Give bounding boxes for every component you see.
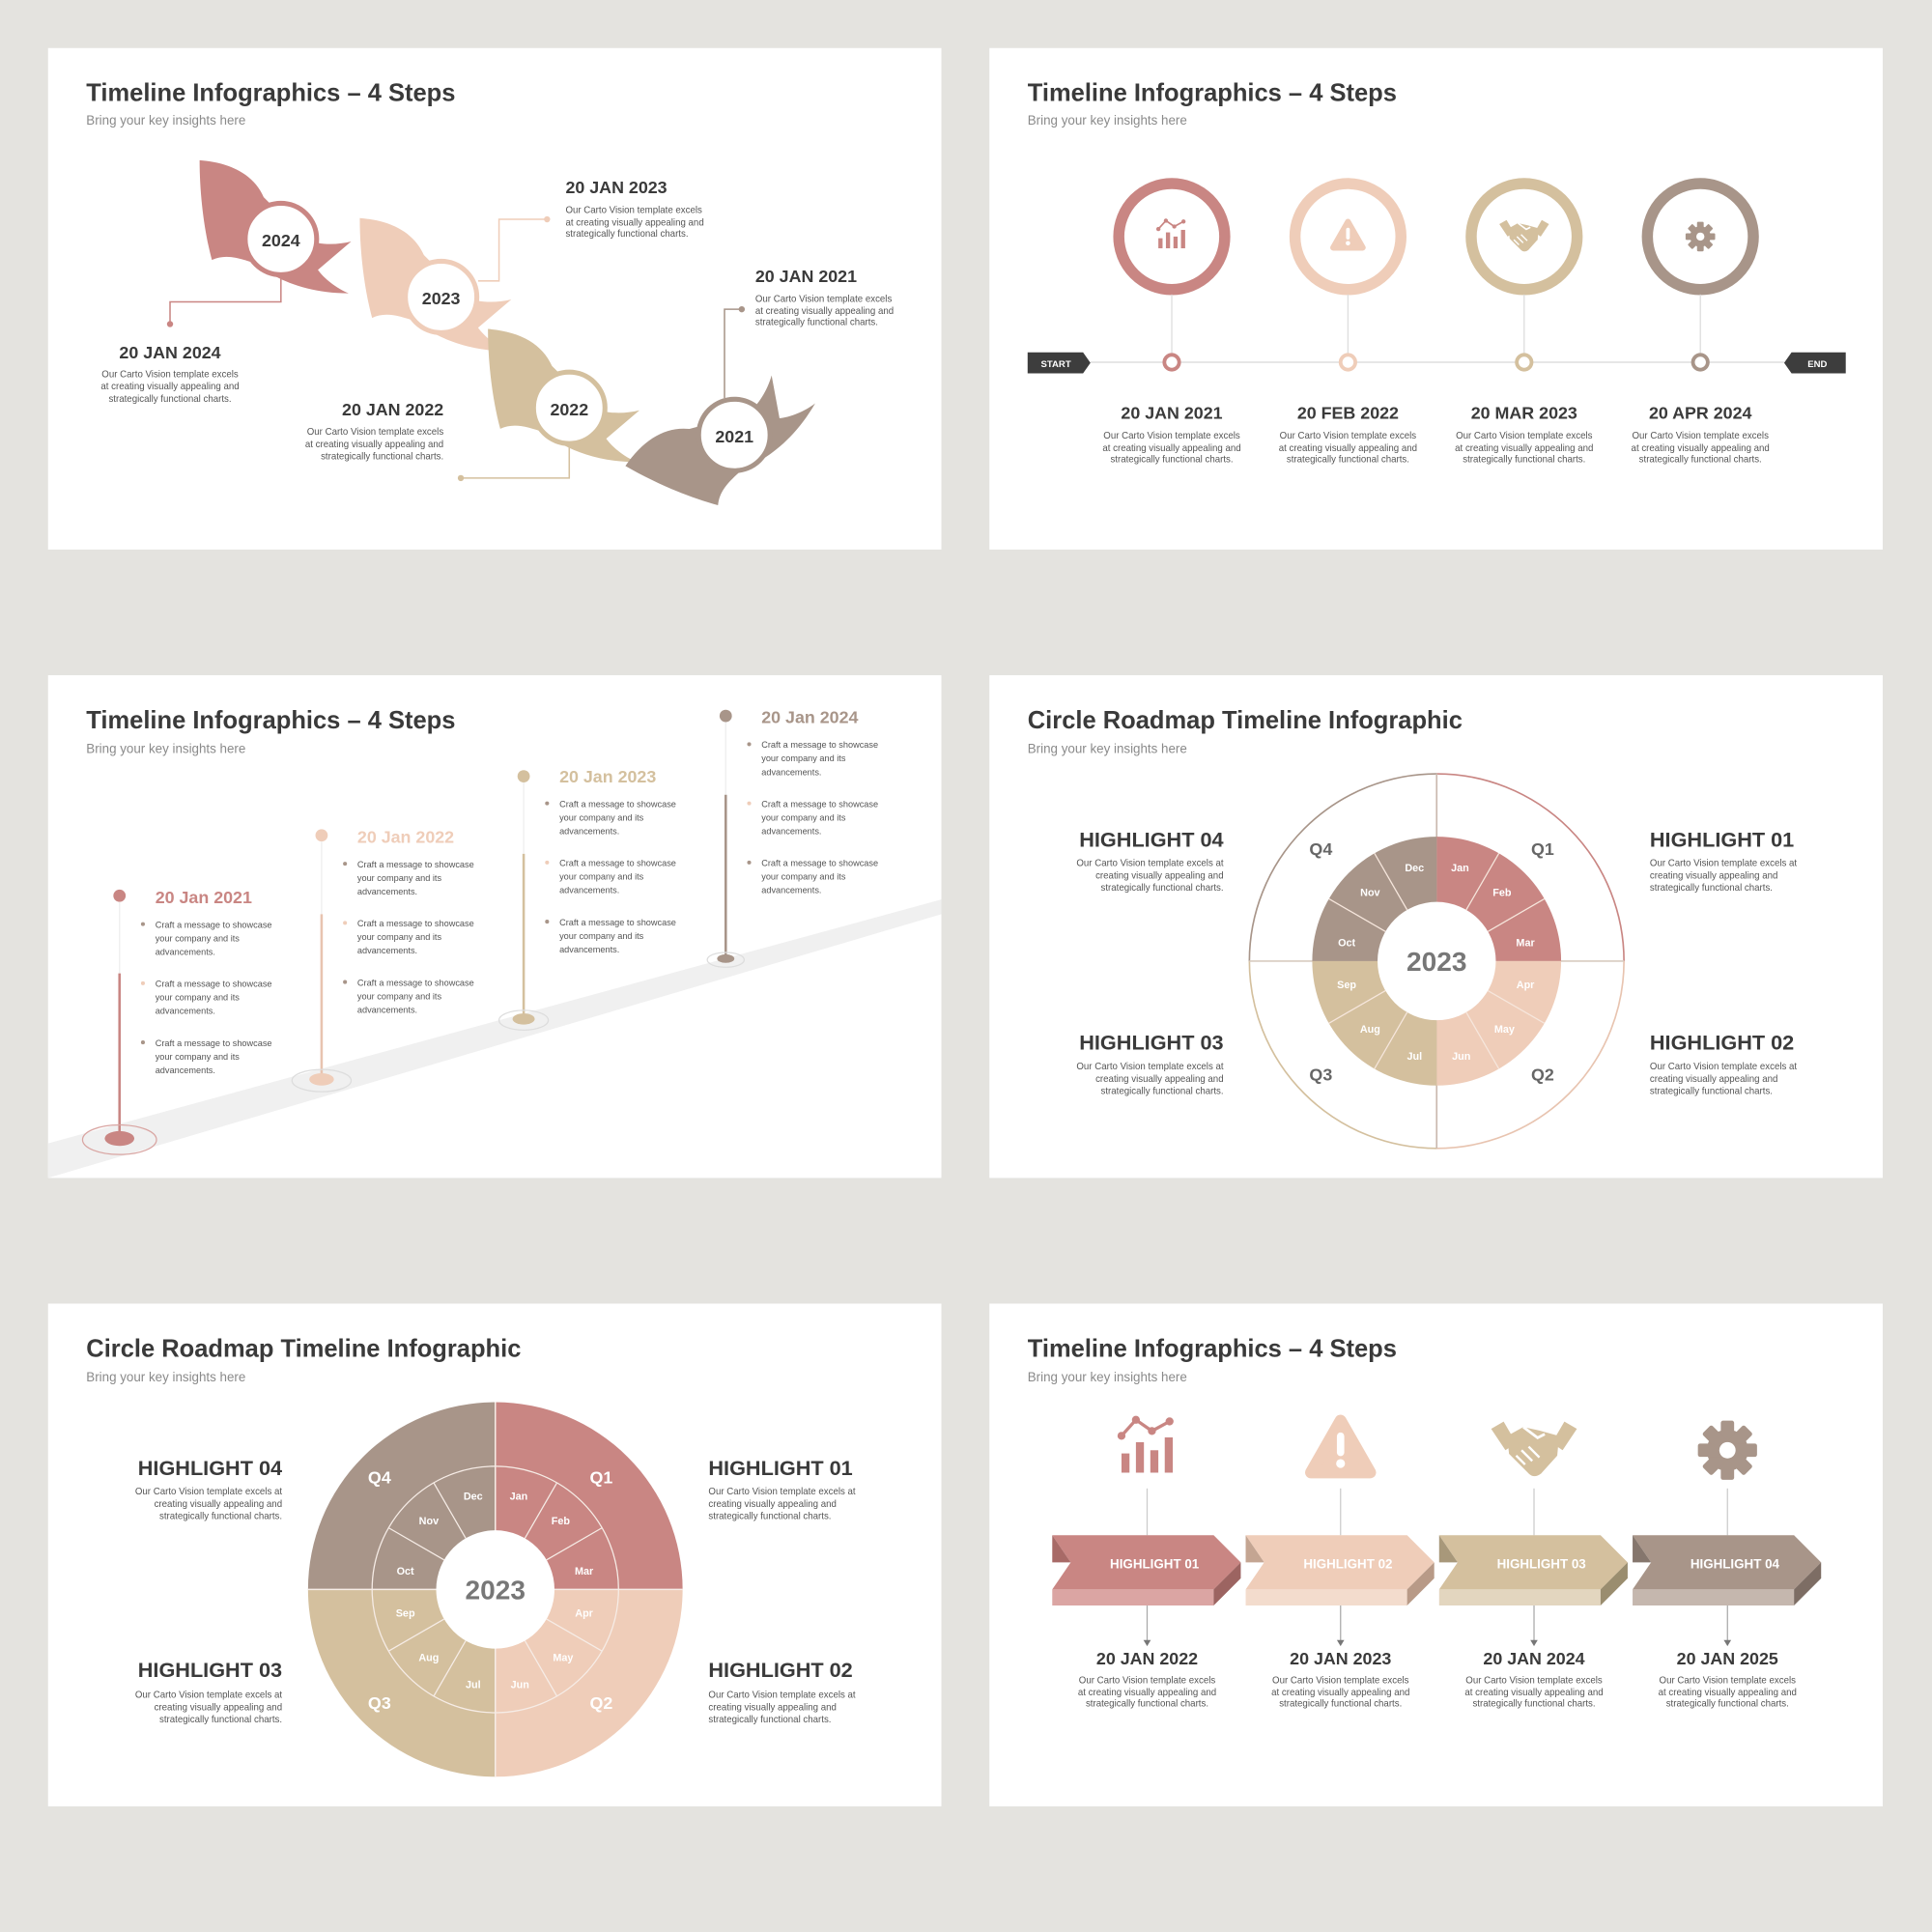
chevron 1: Our Carto Vision template excels xyxy=(1079,1675,1215,1686)
pin 2024: your company and its xyxy=(761,872,846,882)
pin 2024: your company and its xyxy=(761,812,846,822)
filled roadmap chart: Feb xyxy=(552,1516,570,1527)
filled roadmap chart: Q1 xyxy=(590,1468,612,1488)
pin 2023: Craft a message to showcase xyxy=(559,918,676,927)
roadmap circle chart: Q3 xyxy=(1309,1065,1332,1085)
text 2021: Our Carto Vision template excels xyxy=(755,294,892,304)
highlight 03 xyxy=(1076,1031,1224,1097)
step 4: strategically functional charts. xyxy=(1639,454,1762,465)
chevron 2: strategically functional charts. xyxy=(1279,1699,1402,1710)
filled roadmap chart: Q3 xyxy=(368,1693,391,1713)
pin 2022: Craft a message to showcase xyxy=(357,978,474,987)
highlight 03: creating visually appealing and xyxy=(1095,1074,1224,1085)
title: Timeline Infographics – 4 Steps xyxy=(86,80,455,107)
filled roadmap chart: Jun xyxy=(511,1679,529,1690)
highlight 03: strategically functional charts. xyxy=(159,1715,282,1725)
chevron 1: strategically functional charts. xyxy=(1086,1699,1208,1710)
highlight 02: creating visually appealing and xyxy=(1650,1074,1777,1085)
roadmap circle chart: Jul xyxy=(1406,1051,1422,1063)
title: Timeline Infographics – 4 Steps xyxy=(1028,1335,1397,1362)
highlight 01: Our Carto Vision template excels at xyxy=(708,1487,856,1497)
pin 2021 xyxy=(82,888,272,1154)
step 2: 20 FEB 2022 xyxy=(1297,404,1399,423)
roadmap circle chart: Mar xyxy=(1516,938,1535,950)
text 2023: 20 JAN 2023 xyxy=(565,178,668,197)
road xyxy=(48,899,941,1178)
pin 2021: Craft a message to showcase xyxy=(156,980,272,989)
pin 2023 xyxy=(499,767,676,1030)
filled roadmap chart: Jan xyxy=(510,1491,527,1502)
pin 2021: advancements. xyxy=(156,948,215,957)
chevron 2: HIGHLIGHT 02 xyxy=(1303,1557,1392,1572)
end tag xyxy=(1784,353,1846,373)
end tag: END xyxy=(1807,359,1828,370)
pin 2023: your company and its xyxy=(559,872,644,882)
title: Circle Roadmap Timeline Infographic xyxy=(86,1335,521,1362)
chevron 4: strategically functional charts. xyxy=(1666,1699,1789,1710)
arrow shape 2023 xyxy=(359,218,511,352)
text 2023 xyxy=(565,178,704,240)
subtitle: Bring your key insights here xyxy=(86,741,245,755)
step 3: Our Carto Vision template excels xyxy=(1456,431,1593,441)
highlight 01 xyxy=(708,1456,856,1522)
roadmap circle chart xyxy=(1249,774,1624,1149)
pin 2022 xyxy=(292,827,474,1092)
pin 2021: advancements. xyxy=(156,1065,215,1075)
highlight 02: strategically functional charts. xyxy=(1650,1087,1773,1097)
highlight 02: creating visually appealing and xyxy=(708,1702,837,1713)
roadmap circle chart: Q4 xyxy=(1309,839,1332,859)
chevron 4: Our Carto Vision template excels xyxy=(1660,1675,1796,1686)
text 2024: at creating visually appealing and xyxy=(100,382,240,392)
highlight 03: Our Carto Vision template excels at xyxy=(135,1690,282,1701)
highlight 02 xyxy=(708,1658,856,1725)
chevron 1 xyxy=(1052,1416,1240,1710)
pin 2023: your company and its xyxy=(559,812,644,822)
pin 2023: Craft a message to showcase xyxy=(559,799,676,809)
pin 2021: advancements. xyxy=(156,1007,215,1016)
chevron 2: 20 JAN 2023 xyxy=(1290,1649,1391,1668)
highlight 04: strategically functional charts. xyxy=(159,1512,282,1522)
subtitle: Bring your key insights here xyxy=(1028,741,1187,755)
text 2023: at creating visually appealing and xyxy=(565,217,704,228)
arrow shape 2021 xyxy=(625,334,816,532)
title: Timeline Infographics – 4 Steps xyxy=(1028,80,1397,107)
highlight 02: Our Carto Vision template excels at xyxy=(1650,1062,1797,1072)
filled roadmap chart: Q2 xyxy=(590,1693,612,1713)
panel: circle roadmap filled xyxy=(48,1303,941,1806)
chevron 2: Our Carto Vision template excels xyxy=(1272,1675,1409,1686)
arrow shape 2021: 2021 xyxy=(715,427,753,446)
chevron 2 xyxy=(1246,1421,1435,1710)
chevron 2: at creating visually appealing and xyxy=(1271,1688,1409,1698)
chevron 3: strategically functional charts. xyxy=(1472,1699,1596,1710)
pin 2021: Craft a message to showcase xyxy=(156,920,272,929)
highlight 03: creating visually appealing and xyxy=(155,1702,282,1713)
text 2022 xyxy=(305,400,443,463)
highlight 03 xyxy=(135,1658,282,1725)
filled roadmap chart: Mar xyxy=(575,1566,594,1577)
highlight 04 xyxy=(135,1456,282,1522)
filled roadmap chart: Apr xyxy=(575,1607,594,1619)
text 2022: at creating visually appealing and xyxy=(305,440,443,450)
step 1: Our Carto Vision template excels xyxy=(1103,431,1240,441)
pin 2023: your company and its xyxy=(559,931,644,941)
chevron 3: HIGHLIGHT 03 xyxy=(1497,1557,1586,1572)
filled roadmap chart: May xyxy=(553,1652,573,1663)
highlight 04 xyxy=(1076,827,1224,894)
step 2: Our Carto Vision template excels xyxy=(1280,431,1416,441)
highlight 01: HIGHLIGHT 01 xyxy=(708,1456,853,1480)
chevron 3: at creating visually appealing and xyxy=(1464,1688,1604,1698)
pin 2024: advancements. xyxy=(761,767,821,777)
pin 2022: your company and its xyxy=(357,932,441,942)
text 2021: 20 JAN 2021 xyxy=(755,267,857,286)
highlight 03: strategically functional charts. xyxy=(1101,1087,1224,1097)
pin 2022: advancements. xyxy=(357,946,417,955)
roadmap circle chart: Sep xyxy=(1337,980,1356,991)
filled roadmap chart: Oct xyxy=(397,1566,414,1577)
roadmap circle chart: 2023 xyxy=(1406,947,1466,977)
highlight 04: HIGHLIGHT 04 xyxy=(138,1456,282,1480)
roadmap circle chart: Nov xyxy=(1360,887,1380,898)
step 2 xyxy=(1279,184,1417,465)
pin 2021: 20 Jan 2021 xyxy=(156,888,252,907)
filled roadmap chart: Sep xyxy=(396,1607,415,1619)
pin 2023: 20 Jan 2023 xyxy=(559,767,656,786)
panel: steps arrows timeline xyxy=(48,48,941,550)
highlight 02: Our Carto Vision template excels at xyxy=(708,1690,856,1701)
panel: chevron highlights xyxy=(989,1303,1883,1806)
text 2024: Our Carto Vision template excels xyxy=(101,369,239,380)
highlight 02: HIGHLIGHT 02 xyxy=(1650,1031,1794,1055)
highlight 02: HIGHLIGHT 02 xyxy=(708,1658,853,1682)
pin 2022: advancements. xyxy=(357,887,417,896)
roadmap circle chart: Dec xyxy=(1405,863,1424,874)
chevron 3: Our Carto Vision template excels xyxy=(1465,1675,1603,1686)
text 2023: strategically functional charts. xyxy=(565,229,689,240)
pin 2023: advancements. xyxy=(559,886,619,895)
highlight 01: strategically functional charts. xyxy=(708,1512,831,1522)
roadmap circle chart: Aug xyxy=(1360,1024,1380,1036)
step 1: at creating visually appealing and xyxy=(1102,443,1241,454)
pin 2022: 20 Jan 2022 xyxy=(357,827,454,846)
text 2021 xyxy=(755,267,894,328)
panel: circle icon timeline xyxy=(989,48,1883,550)
text 2021: at creating visually appealing and xyxy=(755,306,894,317)
step 3: 20 MAR 2023 xyxy=(1471,404,1577,423)
arrow shape 2023: 2023 xyxy=(422,289,461,308)
highlight 02: strategically functional charts. xyxy=(708,1715,831,1725)
highlight 01: creating visually appealing and xyxy=(1650,870,1777,881)
subtitle: Bring your key insights here xyxy=(1028,1370,1187,1384)
highlight 03: HIGHLIGHT 03 xyxy=(138,1658,282,1682)
panel: pin road timeline xyxy=(48,675,941,1178)
subtitle: Bring your key insights here xyxy=(86,1370,245,1384)
connectors xyxy=(170,219,741,478)
highlight 01: HIGHLIGHT 01 xyxy=(1650,827,1794,851)
step 1: 20 JAN 2021 xyxy=(1121,404,1223,423)
chevron 1: at creating visually appealing and xyxy=(1078,1688,1216,1698)
title: Circle Roadmap Timeline Infographic xyxy=(1028,707,1463,734)
pin 2022: advancements. xyxy=(357,1005,417,1014)
step 1 xyxy=(1102,184,1241,465)
highlight 04: Our Carto Vision template excels at xyxy=(135,1487,282,1497)
highlight 03: HIGHLIGHT 03 xyxy=(1079,1031,1224,1055)
pin 2023: Craft a message to showcase xyxy=(559,859,676,868)
pin 2024: advancements. xyxy=(761,886,821,895)
subtitle: Bring your key insights here xyxy=(1028,113,1187,128)
step 3: strategically functional charts. xyxy=(1463,454,1585,465)
chevron 1: 20 JAN 2022 xyxy=(1096,1649,1198,1668)
pin 2024: 20 Jan 2024 xyxy=(761,708,859,727)
pin 2024: your company and its xyxy=(761,753,846,763)
highlight 04: HIGHLIGHT 04 xyxy=(1079,827,1224,851)
pin 2024: Craft a message to showcase xyxy=(761,859,878,868)
filled roadmap chart: Jul xyxy=(466,1679,481,1690)
arrow shape 2022 xyxy=(488,329,639,462)
step 4 xyxy=(1632,184,1770,465)
highlight 04: Our Carto Vision template excels at xyxy=(1076,859,1224,869)
chevron 4: HIGHLIGHT 04 xyxy=(1690,1557,1780,1572)
chevron 3 xyxy=(1439,1422,1628,1710)
panel: circle roadmap outline xyxy=(989,675,1883,1178)
text 2021: strategically functional charts. xyxy=(755,318,878,328)
pin 2021: your company and its xyxy=(156,1052,240,1062)
filled roadmap chart: 2023 xyxy=(466,1576,526,1605)
start tag xyxy=(1028,353,1091,373)
arrow shape 2024: 2024 xyxy=(262,231,300,250)
step 3 xyxy=(1455,184,1593,465)
filled roadmap chart: Dec xyxy=(464,1491,483,1502)
pin 2022: your company and its xyxy=(357,991,441,1001)
text 2024: 20 JAN 2024 xyxy=(119,343,221,362)
chevron 4: 20 JAN 2025 xyxy=(1677,1649,1778,1668)
highlight 04: creating visually appealing and xyxy=(1095,870,1224,881)
text 2022: strategically functional charts. xyxy=(321,452,443,463)
roadmap circle chart: Jun xyxy=(1452,1051,1470,1063)
text 2022: 20 JAN 2022 xyxy=(342,400,443,419)
step 3: at creating visually appealing and xyxy=(1455,443,1593,454)
pin 2021: Craft a message to showcase xyxy=(156,1038,272,1048)
filled roadmap chart: Nov xyxy=(419,1516,439,1527)
roadmap circle chart: Oct xyxy=(1338,938,1356,950)
chevron 3: 20 JAN 2024 xyxy=(1483,1649,1585,1668)
text 2024: strategically functional charts. xyxy=(108,394,232,405)
start tag: START xyxy=(1041,359,1071,370)
roadmap circle chart: Apr xyxy=(1517,980,1535,991)
pin 2022: your company and its xyxy=(357,873,441,883)
roadmap circle chart: May xyxy=(1494,1024,1515,1036)
pin 2024 xyxy=(707,708,878,967)
pin 2023: advancements. xyxy=(559,945,619,954)
subtitle: Bring your key insights here xyxy=(86,113,245,128)
text 2022: Our Carto Vision template excels xyxy=(307,427,443,438)
step 2: strategically functional charts. xyxy=(1287,454,1409,465)
roadmap circle chart: Q1 xyxy=(1531,839,1554,859)
roadmap circle chart: Feb xyxy=(1492,887,1512,898)
text 2023: Our Carto Vision template excels xyxy=(565,206,702,216)
pin 2023: advancements. xyxy=(559,827,619,837)
highlight 01: creating visually appealing and xyxy=(708,1499,837,1510)
step 2: at creating visually appealing and xyxy=(1279,443,1417,454)
step 1: strategically functional charts. xyxy=(1110,454,1234,465)
pin 2024: Craft a message to showcase xyxy=(761,740,878,750)
step 4: Our Carto Vision template excels xyxy=(1632,431,1769,441)
roadmap circle chart: Q2 xyxy=(1531,1065,1554,1085)
arrow shape 2022: 2022 xyxy=(550,400,588,419)
filled roadmap chart xyxy=(308,1403,683,1776)
highlight 01 xyxy=(1650,827,1797,894)
arrow shape 2024 xyxy=(200,160,352,294)
roadmap circle chart: Jan xyxy=(1451,863,1469,874)
step 4: at creating visually appealing and xyxy=(1632,443,1770,454)
highlight 03: Our Carto Vision template excels at xyxy=(1076,1062,1224,1072)
chevron 4 xyxy=(1633,1421,1821,1710)
pin 2024: advancements. xyxy=(761,827,821,837)
chevron 1: HIGHLIGHT 01 xyxy=(1110,1557,1200,1572)
pin 2024: Craft a message to showcase xyxy=(761,799,878,809)
filled roadmap chart: Aug xyxy=(418,1652,439,1663)
chevron 4: at creating visually appealing and xyxy=(1659,1688,1797,1698)
pin 2022: Craft a message to showcase xyxy=(357,860,474,869)
pin 2021: your company and its xyxy=(156,933,240,943)
highlight 04: strategically functional charts. xyxy=(1101,883,1224,894)
highlight 02 xyxy=(1650,1031,1797,1097)
filled roadmap chart: Q4 xyxy=(368,1468,391,1488)
title: Timeline Infographics – 4 Steps xyxy=(86,707,455,734)
pin 2022: Craft a message to showcase xyxy=(357,919,474,928)
pin 2021: your company and its xyxy=(156,993,240,1003)
highlight 04: creating visually appealing and xyxy=(155,1499,282,1510)
text 2024 xyxy=(100,343,240,405)
highlight 01: Our Carto Vision template excels at xyxy=(1650,859,1797,869)
highlight 01: strategically functional charts. xyxy=(1650,883,1773,894)
step 4: 20 APR 2024 xyxy=(1649,404,1752,423)
